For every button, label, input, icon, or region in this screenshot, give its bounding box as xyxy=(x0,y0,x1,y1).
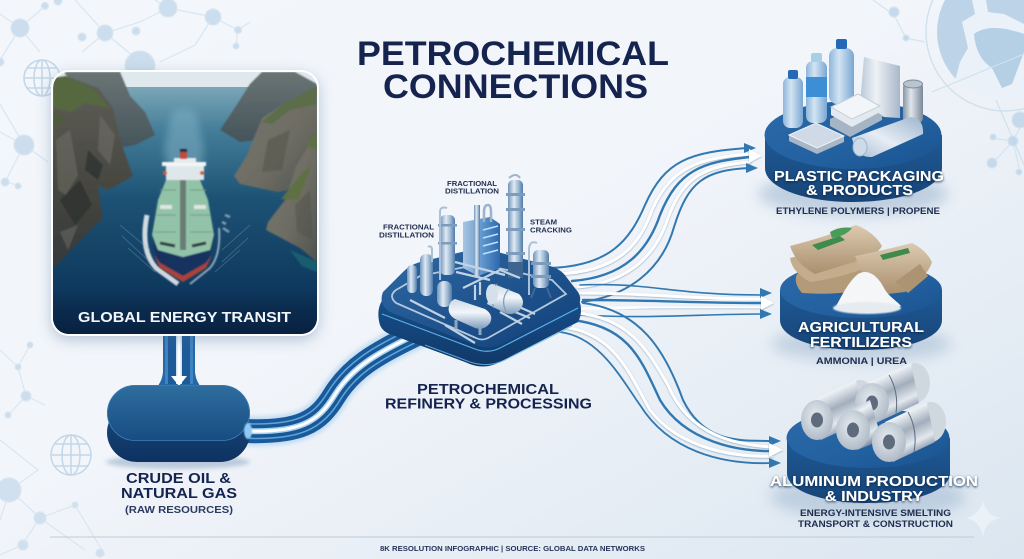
left back cliff xyxy=(64,72,155,150)
label: ALUMINUM PRODUCTION xyxy=(770,473,978,490)
tanker ship xyxy=(152,149,214,282)
pouch xyxy=(860,57,900,118)
flow lines: refinery to aluminum xyxy=(560,303,772,463)
pipe: card to crude tank xyxy=(156,334,202,388)
sublabel: ENERGY-INTENSIVE SMELTING xyxy=(800,508,951,519)
coil front right xyxy=(872,402,946,462)
flow lines: refinery to plastics xyxy=(550,148,750,302)
caption gradient xyxy=(53,308,317,334)
small vessels xyxy=(407,246,452,307)
decorative network: top right xyxy=(873,0,1024,175)
label: refinery process callouts: DISTILLATION xyxy=(445,186,499,196)
left distillation column xyxy=(438,208,457,280)
central process block xyxy=(463,205,500,277)
panel: aluminum production xyxy=(770,363,978,530)
front tray xyxy=(789,123,844,154)
footer rule xyxy=(50,536,974,538)
title: PETROCHEMICAL xyxy=(357,35,669,73)
label: crude oil xyxy=(121,471,237,516)
sublabel: ETHYLENE POLYMERS | PROPENE xyxy=(776,206,940,217)
pedestal xyxy=(771,262,951,362)
label: refinery process callouts: CRACKING xyxy=(530,226,572,234)
decorative network: left side xyxy=(0,104,48,418)
label: refinery process callouts xyxy=(379,179,572,240)
sublabel xyxy=(798,508,953,530)
right back cliff xyxy=(220,72,317,142)
coil front middle xyxy=(836,400,882,450)
label: crude oil: (RAW RESOURCES) xyxy=(125,504,233,516)
arrowheads: plastics xyxy=(744,143,762,173)
refinery platform with equipment xyxy=(378,175,581,366)
label: refinery: REFINERY & PROCESSING xyxy=(385,396,592,412)
fertilizer pile xyxy=(833,272,901,314)
decorative globe top right xyxy=(926,0,1024,165)
steam cracking column xyxy=(529,242,551,298)
horizontal drums xyxy=(486,284,523,314)
icon: small globe top left xyxy=(24,60,60,96)
platform pipes xyxy=(410,262,535,343)
label: refinery: PETROCHEMICAL xyxy=(417,382,559,398)
stacked trays xyxy=(830,94,882,137)
pedestal xyxy=(770,408,966,519)
sky and sea xyxy=(53,72,317,334)
crude oil tank xyxy=(106,385,252,469)
title: CONNECTIONS xyxy=(383,68,648,106)
horizontal storage tank xyxy=(449,299,491,335)
arrowheads: aluminum xyxy=(769,436,783,468)
label: AGRICULTURAL xyxy=(798,319,924,336)
wake xyxy=(120,108,250,284)
label: crude oil: CRUDE OIL & xyxy=(126,471,232,487)
label xyxy=(774,168,944,199)
coil back right xyxy=(855,363,930,423)
footer text: 8K RESOLUTION INFOGRAPHIC | SOURCE: GLOBAL DATA NETWORKS xyxy=(380,544,645,553)
icon: small globe bottom left xyxy=(51,435,91,475)
platform rails xyxy=(392,264,566,340)
panel: plastic packaging xyxy=(758,39,948,217)
sublabel: TRANSPORT & CONSTRUCTION xyxy=(798,519,953,530)
platform base xyxy=(378,249,581,366)
tall distillation column xyxy=(506,175,525,278)
label: refinery process callouts: FRACTIONAL xyxy=(383,222,434,232)
fertilizer sacks xyxy=(790,225,932,295)
left front cliff xyxy=(53,76,133,268)
panel: global energy transit photo card xyxy=(51,70,319,336)
decorative network: bottom left xyxy=(0,440,105,557)
film roll xyxy=(852,117,923,157)
label xyxy=(798,319,924,351)
label: FERTILIZERS xyxy=(810,334,912,351)
title xyxy=(357,35,669,106)
label: refinery process callouts: STEAM xyxy=(530,218,557,226)
pipe: crude tank to refinery xyxy=(245,328,430,431)
label: & PRODUCTS xyxy=(806,182,913,199)
flow lines: refinery to fertilizers xyxy=(580,285,762,317)
label xyxy=(770,473,978,505)
label: refinery xyxy=(385,382,592,412)
can xyxy=(903,80,923,123)
sublabel: AMMONIA | UREA xyxy=(816,356,907,367)
pedestal xyxy=(758,101,948,216)
decorative network: top left xyxy=(0,0,250,81)
right front cliff xyxy=(234,86,317,272)
label: crude oil: NATURAL GAS xyxy=(121,486,237,502)
label: refinery process callouts: FRACTIONAL xyxy=(447,179,497,188)
label: PLASTIC PACKAGING xyxy=(774,168,944,185)
card caption: GLOBAL ENERGY TRANSIT xyxy=(78,309,291,326)
plastic bottles xyxy=(783,39,854,128)
icon: sparkle xyxy=(966,500,1000,536)
arrowheads: fertilizers xyxy=(760,288,774,319)
label: & INDUSTRY xyxy=(825,488,923,505)
coil back left xyxy=(801,380,875,440)
label: refinery process callouts: DISTILLATION xyxy=(379,230,434,240)
panel: agricultural fertilizers xyxy=(771,225,951,367)
